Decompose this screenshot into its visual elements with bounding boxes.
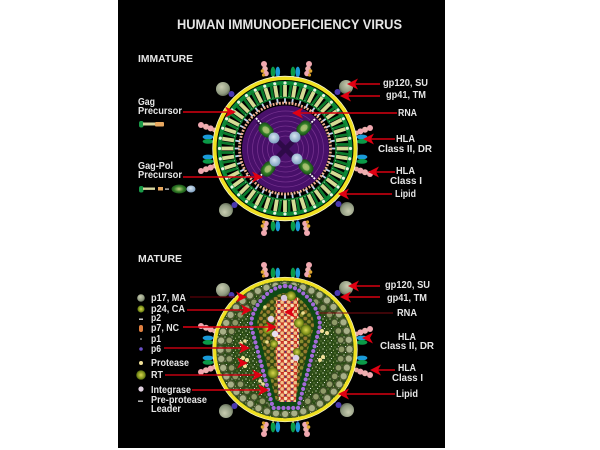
- labels and arrows: immature right side: Lipid: [395, 189, 416, 200]
- label and arrow: Gag precursor: Gag: [138, 97, 155, 108]
- legend: mature virion proteins: Leader: [151, 404, 181, 415]
- heading: mature: MATURE: [138, 254, 182, 265]
- labels and arrows: immature right side: gp41, TM: [386, 90, 426, 101]
- protease clusters: [239, 329, 329, 386]
- labels and arrows: immature right side: Class I: [390, 176, 422, 187]
- envelope proteins: mature: [198, 262, 373, 437]
- diagram: mature virion: [213, 277, 357, 422]
- legend: mature virion proteins: p2: [151, 313, 161, 324]
- legend: mature virion proteins: RT: [151, 370, 163, 381]
- black poster panel: [118, 0, 445, 448]
- legend: mature virion proteins: p17, MA: [151, 293, 186, 304]
- icon: Gag-Pol precursor: [139, 184, 196, 194]
- labels and arrows: immature right side: gp120, SU: [383, 78, 428, 89]
- legend: mature virion proteins: Protease: [151, 358, 189, 369]
- label and arrow: Gag precursor: [138, 97, 236, 118]
- labels and arrows: immature right side: RNA: [398, 108, 417, 119]
- labels and arrows: mature right side: Class II, DR: [380, 341, 435, 352]
- heading: immature: IMMATURE: [138, 54, 193, 65]
- labels and arrows: mature right side: gp120, SU: [385, 280, 430, 291]
- envelope proteins: immature: [198, 61, 373, 236]
- icon: Gag precursor: [139, 121, 164, 128]
- labels and arrows: mature right side: RNA: [397, 308, 417, 319]
- legend: mature virion proteins: p7, NC: [151, 323, 179, 334]
- labels and arrows: immature right side: HLA: [396, 134, 415, 145]
- arrows: mature left side: [164, 292, 295, 396]
- labels and arrows: mature right side: Class I: [392, 373, 423, 384]
- RNA core: [242, 106, 329, 192]
- title: HUMAN IMMUNODEFICIENCY VIRUS: [177, 16, 402, 32]
- matrix protein shell: [220, 285, 350, 414]
- labels and arrows: immature right side: HLA: [396, 166, 415, 177]
- labels and arrows: mature right side: Lipid: [396, 389, 418, 400]
- label and arrow: Gag-Pol precursor: [138, 161, 263, 182]
- diagram: immature virion: [209, 72, 361, 225]
- labels and arrows: mature right side: [318, 280, 435, 400]
- label and arrow: Gag-Pol precursor: Gag-Pol: [138, 161, 173, 172]
- labels and arrows: mature right side: gp41, TM: [387, 293, 427, 304]
- label and arrow: Gag precursor: Precursor: [138, 106, 182, 117]
- legend: mature virion proteins: Pre-protease: [151, 395, 207, 406]
- legend: mature virion proteins: Integrase: [151, 385, 191, 396]
- legend: mature virion proteins: p6: [151, 344, 161, 355]
- labels and arrows: mature right side: HLA: [398, 363, 416, 374]
- labels and arrows: immature right side: Class II, DR: [378, 144, 433, 155]
- labels and arrows: immature right side: [292, 78, 433, 200]
- legend: mature virion proteins: [136, 293, 207, 415]
- labels and arrows: mature right side: HLA: [398, 332, 416, 343]
- legend: mature virion proteins: p24, CA: [151, 304, 185, 315]
- label and arrow: Gag-Pol precursor: Precursor: [138, 170, 182, 181]
- conical capsid: [251, 286, 320, 408]
- Gag-Pol precursors in core: [256, 118, 316, 180]
- legend: mature virion proteins: p1: [151, 334, 161, 345]
